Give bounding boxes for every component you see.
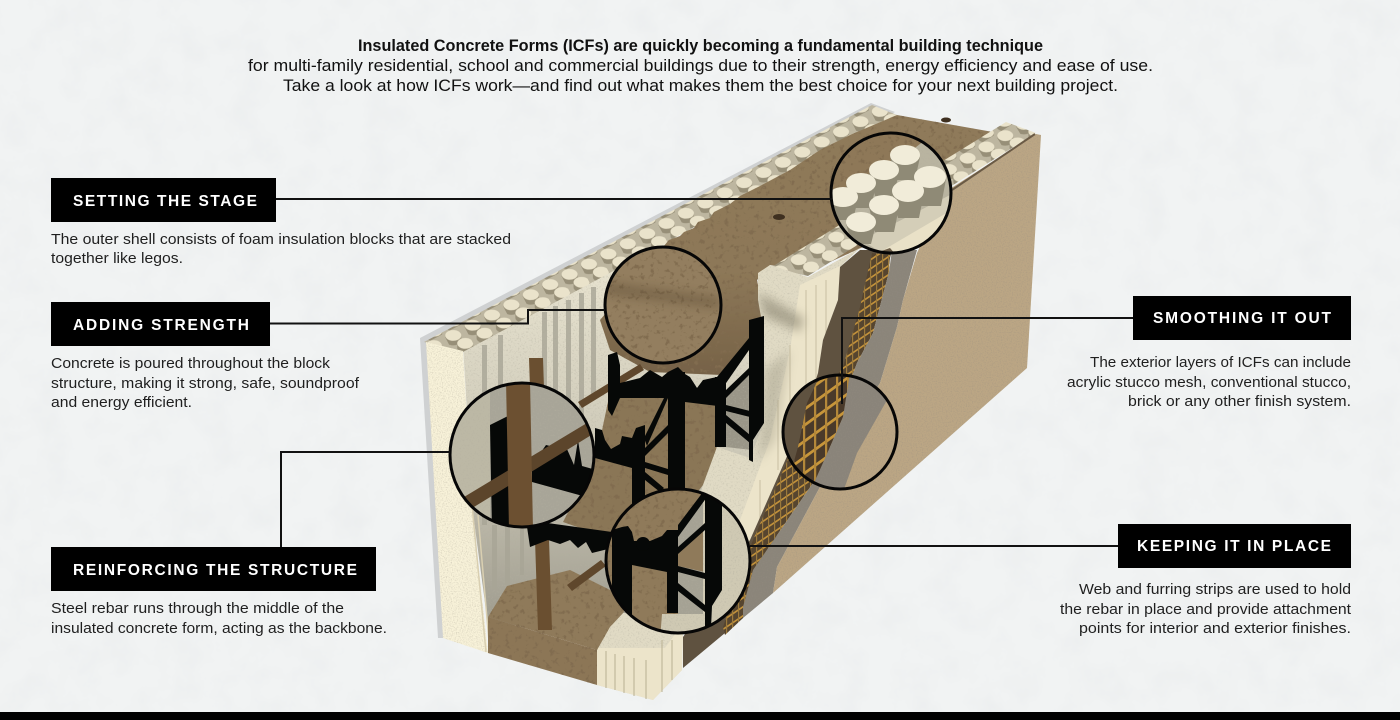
panel: adding strength <box>51 302 605 411</box>
body text: structure, making it strong, safe, soundproof <box>51 375 360 392</box>
heading: keeping it in place: KEEPING IT IN PLACE <box>1137 538 1331 555</box>
intro text <box>248 37 1153 95</box>
body text: The exterior layers of ICFs can include <box>1090 354 1351 371</box>
bottom bar <box>0 712 1400 720</box>
heading: setting the stage <box>51 178 276 222</box>
right foam form <box>597 248 860 700</box>
grey stucco coat <box>743 250 917 618</box>
upper concrete core <box>600 115 993 375</box>
black web and furring strips, upper <box>608 316 764 490</box>
heading: adding strength <box>51 302 270 346</box>
panel: smoothing it out <box>842 296 1351 410</box>
body text: brick or any other finish system. <box>1128 393 1351 410</box>
leader line to web magnifier <box>750 545 1118 547</box>
body text: together like legos. <box>51 250 183 267</box>
body text <box>51 600 387 637</box>
body text: acrylic stucco mesh, conventional stucco, <box>1067 374 1351 391</box>
heading: keeping it in place <box>1118 524 1351 568</box>
body text: Web and furring strips are used to hold <box>1079 581 1351 598</box>
heading: smoothing it out <box>1133 296 1351 340</box>
heading: adding strength: ADDING STRENGTH <box>73 317 249 334</box>
intro text: Take a look at how ICFs work—and find out what makes them the best choice for your next building project. <box>283 77 1118 95</box>
foam studs left strip <box>424 105 897 352</box>
stucco mesh <box>723 253 890 635</box>
tan exterior finish <box>773 134 1041 593</box>
magnifier: stucco mesh <box>784 376 886 488</box>
base coat layer <box>683 250 892 668</box>
magnifier: web strip <box>608 493 748 632</box>
magnifier: rebar <box>452 384 592 526</box>
diagonal rebar <box>567 364 644 591</box>
magnifier: concrete <box>606 248 719 362</box>
black web and furring strips, middle <box>595 396 668 508</box>
black web and furring strips, lower <box>526 520 612 553</box>
body text <box>51 355 360 411</box>
interior ribbed foam face <box>463 238 770 625</box>
heading: reinforcing the structure <box>51 547 376 591</box>
panel: reinforcing the structure <box>51 452 450 637</box>
body text: points for interior and exterior finishes. <box>1079 620 1351 637</box>
leader line to concrete magnifier <box>270 310 605 324</box>
body text: Concrete is poured throughout the block <box>51 355 331 372</box>
panel: keeping it in place <box>750 524 1352 637</box>
heading: reinforcing the structure: REINFORCING THE STRUCTURE <box>73 562 357 579</box>
magnifier: foam studs <box>832 143 950 252</box>
body text: The outer shell consists of foam insulation blocks that are stacked <box>51 231 511 248</box>
ICF wall cutaway illustration <box>420 103 1041 700</box>
leader line to mesh magnifier <box>842 318 1133 404</box>
body text: and energy efficient. <box>51 394 192 411</box>
intro text: for multi-family residential, school and commercial buildings due to their strength, energy efficiency and ease of use. <box>248 57 1153 75</box>
body text: the rebar in place and provide attachment <box>1060 601 1352 618</box>
mid concrete core <box>563 392 726 535</box>
left end foam block <box>426 342 490 653</box>
body text <box>1067 354 1351 410</box>
body text <box>1060 581 1352 637</box>
vertical rebar <box>529 358 552 630</box>
grey recess behind upper web <box>726 370 752 450</box>
heading: smoothing it out: SMOOTHING IT OUT <box>1153 310 1332 327</box>
body text <box>51 231 511 267</box>
intro text: Insulated Concrete Forms (ICFs) are quickly becoming a fundamental building technique <box>358 37 1043 55</box>
bottom concrete slab <box>488 570 630 685</box>
wall drop shadow <box>420 103 895 638</box>
body text: insulated concrete form, acting as the backbone. <box>51 620 387 637</box>
leader line to rebar magnifier <box>281 452 450 547</box>
leader line to stud magnifier <box>276 198 832 200</box>
heading: setting the stage: SETTING THE STAGE <box>73 193 257 210</box>
far foam stud strip <box>770 122 1036 276</box>
panel: setting the stage <box>51 178 832 267</box>
body text: Steel rebar runs through the middle of the <box>51 600 344 617</box>
